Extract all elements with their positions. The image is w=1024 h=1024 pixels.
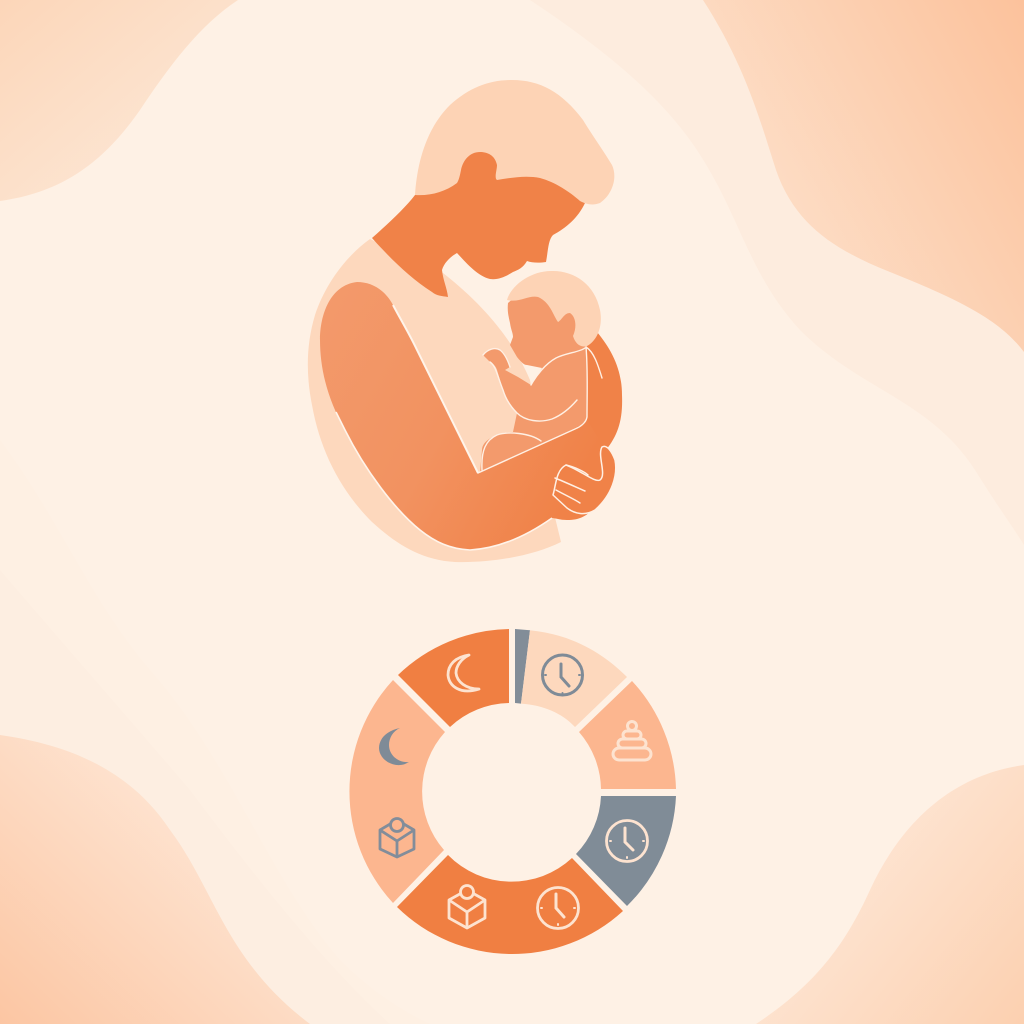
icon: block on peach [380,818,414,857]
icon: clock slate on light peach [542,655,582,695]
icon: crescent moon slate [379,728,409,765]
mother's near arm [320,282,616,550]
segment: slate right [576,796,676,906]
icon: clock on slate [606,820,648,862]
wave: top left [0,0,238,201]
mother's far arm [550,332,622,490]
segment: peach top right [579,681,676,789]
segment: light peach [521,630,627,727]
mother's hair [415,80,614,204]
mother's fingers [555,465,588,503]
icon: crescent moon outline [448,655,479,691]
icon: clock on orange [538,888,578,928]
baby's body [480,288,587,473]
icon: stacking rings [613,722,651,760]
wave: bottom left [0,735,310,1024]
mother's torso [308,239,561,562]
donut chart [349,629,676,954]
wave: bottom right [756,765,1024,1024]
segment: sliver slate [515,629,530,704]
illustration: mother holding baby [308,80,622,562]
segment: orange top [398,629,509,727]
wave: top right [703,0,1024,352]
arm highlight edge [393,305,478,473]
segment: peach left [349,680,445,903]
baby outline details [478,347,602,473]
baby's hair [507,271,601,346]
segment: orange bottom [397,855,623,954]
arm outline [336,412,552,550]
icon: block on orange [449,886,485,928]
mother's head and neck [372,140,585,297]
mother's hand [553,446,616,514]
